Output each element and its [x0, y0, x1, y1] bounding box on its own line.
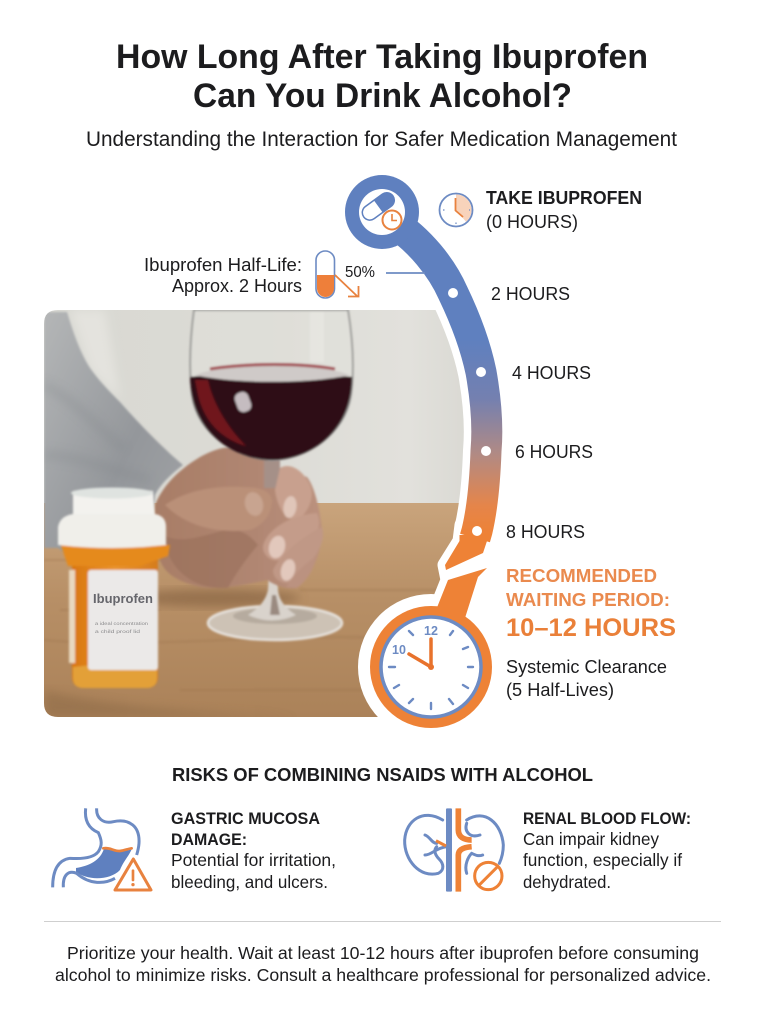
- timeline labels: [491, 284, 593, 542]
- big clock: [370, 606, 492, 728]
- gastric mucosa text: GASTRIC MUCOSA: [171, 810, 320, 828]
- bottle label text: a child proof lid: [95, 629, 141, 634]
- footer advice: alcohol to minimize risks. Consult a healthcare professional for personalized advice.: [55, 965, 711, 985]
- glass stem and foot: [206, 580, 344, 643]
- renal blood flow text: Can impair kidney: [523, 829, 659, 849]
- step: take ibuprofen: TAKE IBUPROFEN: [486, 188, 642, 208]
- wine glass: [190, 310, 353, 460]
- risks heading: RISKS OF COMBINING NSAIDS WITH ALCOHOL: [172, 764, 593, 785]
- big clock: 10: [392, 643, 406, 657]
- title: [116, 38, 648, 115]
- icon: half-empty capsule: [316, 251, 358, 298]
- half-life label: Ibuprofen Half-Life:: [144, 255, 302, 275]
- thumb: [165, 487, 272, 531]
- renal blood flow text: RENAL BLOOD FLOW:: [523, 810, 691, 828]
- photo: wine glass and ibuprofen bottle: [44, 310, 474, 717]
- half-life label: Approx. 2 Hours: [172, 276, 302, 296]
- waiting period callout: WAITING PERIOD:: [506, 589, 670, 610]
- timeline labels: 4 HOURS: [512, 363, 591, 383]
- waiting period callout: 10–12 HOURS: [506, 614, 676, 642]
- ribbon halo: [392, 222, 492, 618]
- ribbon tail to clock: [436, 568, 487, 618]
- step: take ibuprofen: (0 HOURS): [486, 212, 578, 232]
- fingers: [275, 466, 312, 520]
- half-life percent: 50%: [345, 264, 375, 281]
- half-life label: [144, 255, 302, 296]
- icon: small orange clock: [382, 210, 402, 230]
- sleeve: [44, 311, 184, 552]
- gastric mucosa text: Potential for irritation,: [171, 850, 336, 870]
- waiting period callout: RECOMMENDED: [506, 565, 657, 586]
- systemic clearance note: [506, 657, 667, 700]
- bottle label text: a ideal concentration: [95, 621, 149, 626]
- waiting period callout: [506, 565, 676, 642]
- half-life connector: [386, 272, 425, 274]
- table: [44, 503, 474, 717]
- title: How Long After Taking Ibuprofen: [116, 38, 648, 76]
- icon: kidneys with prohibition sign: [405, 808, 503, 892]
- footer advice: [55, 943, 711, 985]
- ribbon dots: [448, 288, 491, 536]
- bottle label text: [93, 591, 153, 634]
- icon: capsule: [359, 190, 397, 223]
- systemic clearance note: (5 Half-Lives): [506, 680, 614, 700]
- icon: stomach with warning: [53, 808, 151, 890]
- timeline ribbon: [392, 222, 491, 570]
- timeline labels: 8 HOURS: [506, 522, 585, 542]
- step: take ibuprofen: [486, 188, 642, 232]
- systemic clearance note: Systemic Clearance: [506, 657, 667, 677]
- gastric mucosa text: bleeding, and ulcers.: [171, 872, 328, 892]
- icon: clock at 0 hours: [440, 194, 472, 226]
- renal blood flow text: [523, 810, 691, 892]
- gastric mucosa text: [171, 810, 336, 892]
- bottle label text: Ibuprofen: [93, 591, 153, 606]
- hand: [154, 447, 323, 588]
- start node with pill and clock icon: [345, 175, 419, 249]
- big clock: 12: [424, 624, 438, 638]
- renal blood flow text: dehydrated.: [523, 872, 611, 892]
- clock halo: [358, 594, 504, 740]
- footer advice: Prioritize your health. Wait at least 10-12 hours after ibuprofen before consuming: [67, 943, 699, 963]
- timeline labels: 6 HOURS: [515, 442, 593, 462]
- title: Can You Drink Alcohol?: [193, 77, 572, 115]
- gastric mucosa text: DAMAGE:: [171, 831, 247, 849]
- subtitle: Understanding the Interaction for Safer Medication Management: [86, 127, 677, 151]
- renal blood flow text: function, especially if: [523, 850, 682, 870]
- timeline labels: 2 HOURS: [491, 284, 570, 304]
- pill bottle: [58, 488, 170, 688]
